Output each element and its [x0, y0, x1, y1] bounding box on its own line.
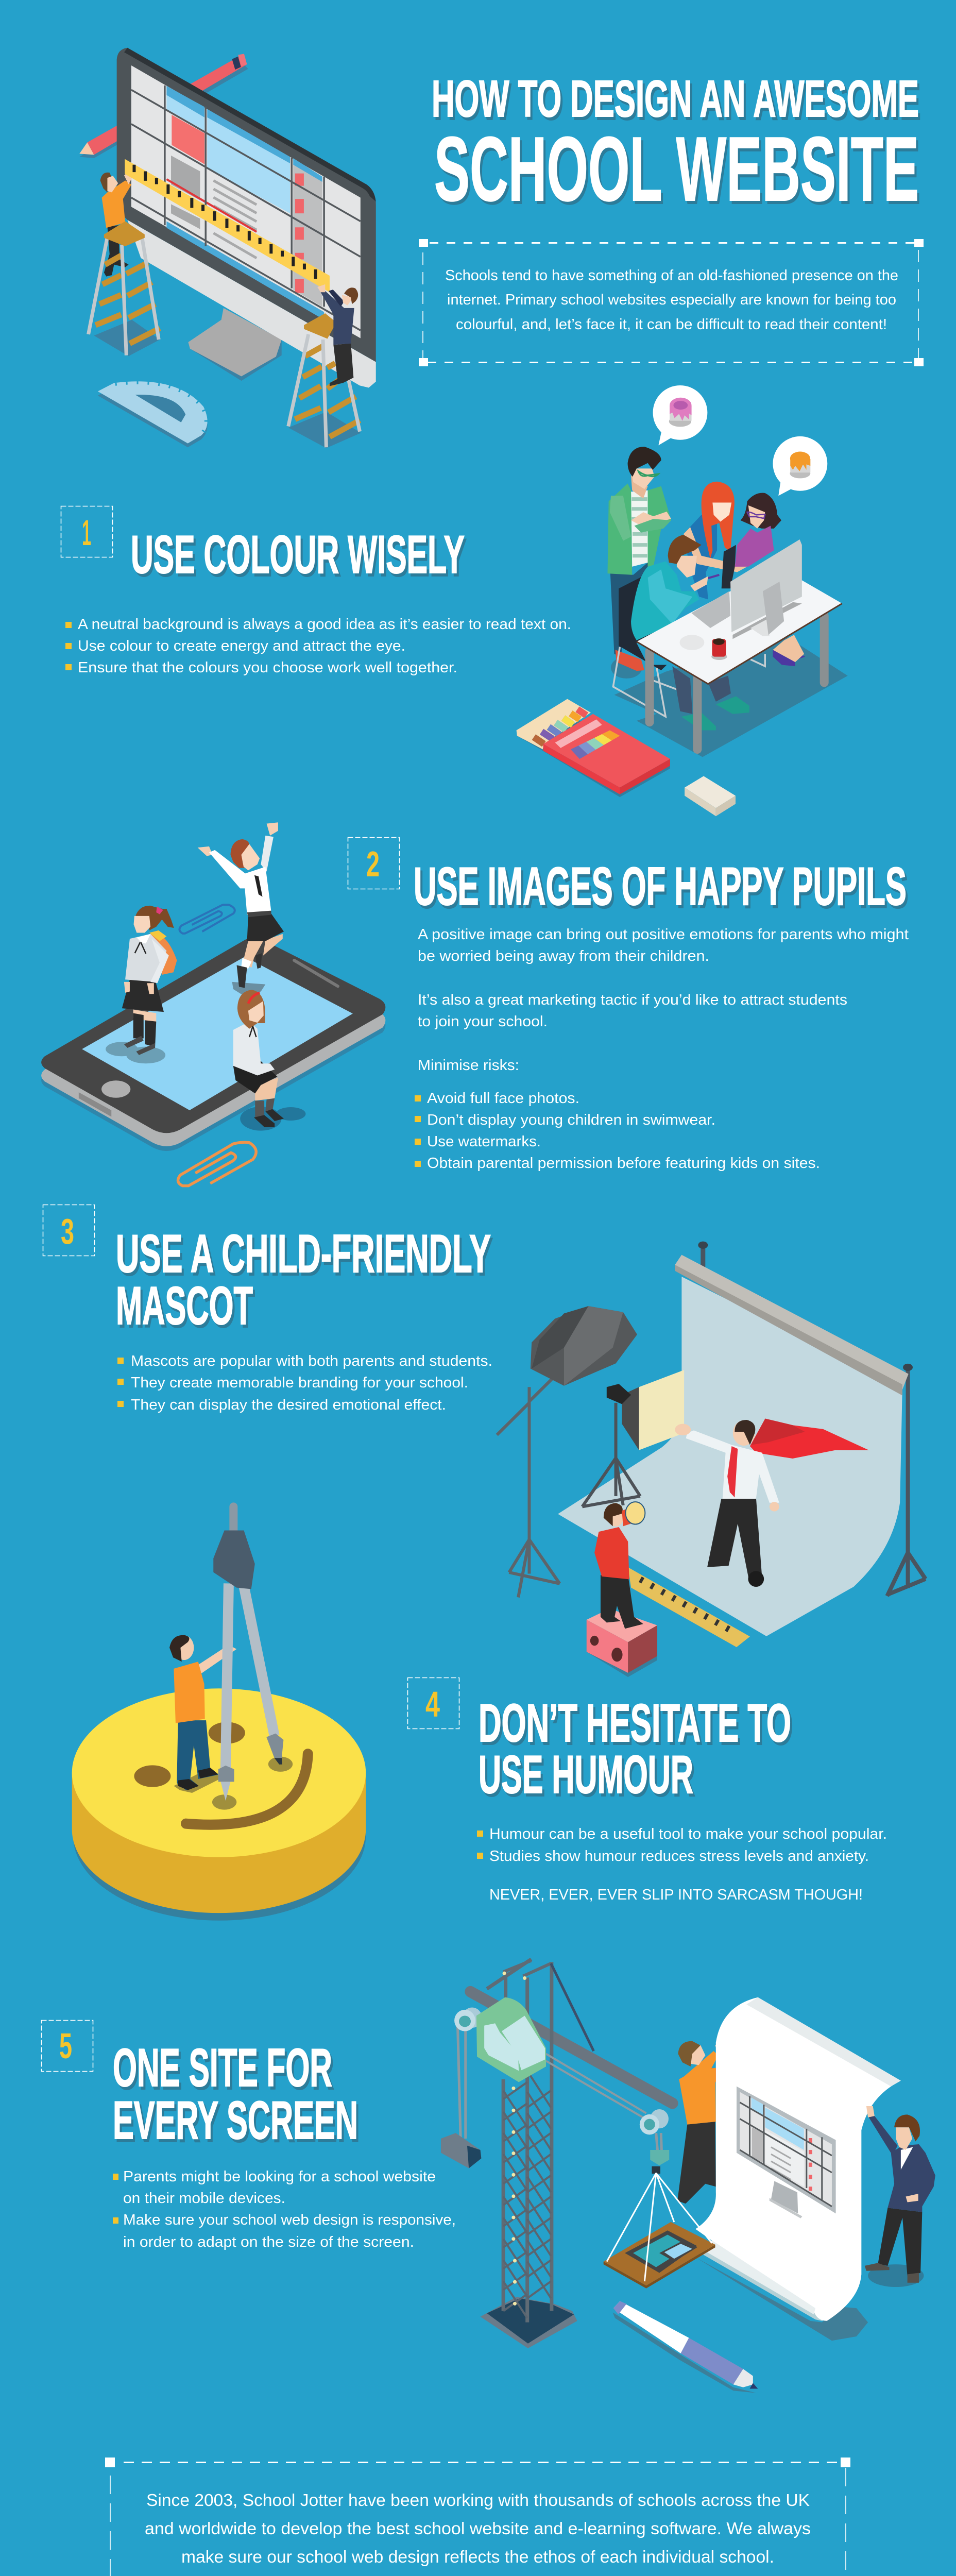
- heading 4: [479, 1693, 791, 1805]
- closing text: and worldwide to develop the best school website and e-learning software. We always: [145, 2519, 811, 2538]
- panel: step 2 use images of happy pupils: [348, 838, 909, 1172]
- number box 1: [61, 506, 112, 557]
- icon: backdrop poles: [698, 1242, 926, 1596]
- panel: step 5 one site for every screen: [41, 2021, 456, 2250]
- icon: red pencil: [79, 54, 248, 158]
- heading 5: ONE SITE FOR: [113, 2038, 332, 2098]
- bullet list 5: Make sure your school web design is responsive,: [123, 2212, 456, 2228]
- paragraph text: Minimise risks:: [418, 1057, 519, 1074]
- icon: yellow ruler: [125, 159, 330, 292]
- icon: pen: [613, 2301, 758, 2393]
- number box 2: 2: [366, 844, 380, 884]
- icon: chair: [613, 575, 765, 717]
- dashed frame: [105, 2458, 850, 2576]
- bullet list 2: Obtain parental permission before featuring kids on sites.: [427, 1155, 820, 1172]
- icon: paper sheet: [695, 1997, 901, 2321]
- bullet list 3: Mascots are popular with both parents and students.: [131, 1353, 492, 1369]
- icon: eraser: [685, 776, 736, 816]
- bullet list 2: [415, 1090, 820, 1172]
- panel: smiley and compass illustration: [72, 1502, 750, 1921]
- bullet list 5: [113, 2168, 456, 2250]
- dashed frame: [419, 239, 924, 366]
- panel: closing dashed box: [105, 2458, 850, 2576]
- number box 5: 5: [59, 2026, 72, 2066]
- icon: yellow measuring tape: [628, 1567, 750, 1647]
- icon: blue paperclip: [179, 905, 235, 934]
- number box 4: [408, 1677, 459, 1729]
- person: man in orange with compass: [169, 1635, 236, 1790]
- number box 4: 4: [425, 1684, 440, 1724]
- person: mascot hero with cape: [675, 1418, 869, 1587]
- person: sitting girl: [233, 990, 305, 1131]
- bullet list 2: Use watermarks.: [427, 1133, 541, 1150]
- number box 3: 3: [61, 1211, 74, 1251]
- bullet list 5: on their mobile devices.: [123, 2190, 285, 2207]
- panel: photo studio illustration: [497, 1242, 926, 1636]
- bullet list 2: Avoid full face photos.: [427, 1090, 579, 1107]
- person: man in navy jacket: [865, 2106, 935, 2287]
- person: worker in orange: [100, 172, 132, 277]
- person: seated man in teal: [631, 535, 805, 731]
- bullet list 1: A neutral background is always a good idea as it’s easier to read text on.: [78, 616, 571, 633]
- icon: speech bubble pink paint: [653, 385, 707, 445]
- closing text: Since 2003, School Jotter have been working with thousands of schools across the UK: [146, 2490, 810, 2510]
- intro text: Schools tend to have something of an old-fashioned presence on the: [445, 267, 898, 284]
- icon: crane: [441, 1959, 673, 2348]
- panel: crane and responsive page illustration: [441, 1959, 935, 2393]
- bullet list 1: Use colour to create energy and attract the eye.: [78, 638, 405, 654]
- bullet list 4: [477, 1826, 887, 1865]
- number box 1: 1: [82, 513, 91, 553]
- icon: monitor chin: [127, 220, 376, 387]
- icon: left ladder: [89, 221, 160, 356]
- paragraph text: It’s also a great marketing tactic if you’d like to attract students: [418, 992, 847, 1008]
- number box 2: [348, 838, 400, 889]
- intro text: [445, 267, 898, 333]
- callout: sarcasm warning: NEVER, EVER, EVER SLIP INTO SARCASM THOUGH!: [489, 1887, 863, 1903]
- intro text: internet. Primary school websites especially are known for being too: [447, 292, 896, 308]
- bullet list 5: in order to adapt on the size of the screen.: [123, 2234, 414, 2250]
- bullet list 1: Ensure that the colours you choose work well together.: [78, 659, 457, 676]
- icon: crayon box: [517, 699, 670, 797]
- heading 3: [116, 1224, 491, 1336]
- closing text: make sure our school web design reflects the ethos of each individual school.: [181, 2547, 774, 2566]
- heading 4: USE HUMOUR: [479, 1745, 693, 1805]
- title: [432, 70, 919, 220]
- heading 3: USE A CHILD-FRIENDLY: [116, 1224, 491, 1284]
- paragraph text: be worried being away from their children.: [418, 948, 709, 964]
- bullet list 1: [65, 616, 571, 676]
- icon: smiley disk: [72, 1688, 366, 1921]
- person: worker in navy: [317, 284, 358, 386]
- person: man with green jacket: [608, 447, 671, 671]
- heading 5: [113, 2038, 358, 2150]
- icon: compass: [213, 1506, 283, 1801]
- panel: header illustration, monitor with ladders: [79, 48, 376, 448]
- person: red haired woman: [684, 482, 747, 599]
- bullet list 3: They create memorable branding for your school.: [131, 1375, 468, 1391]
- panel: intro dashed box: [419, 239, 924, 366]
- person: worker in orange: [677, 2038, 726, 2204]
- person: girl with backpack: [106, 906, 177, 1063]
- icon: desk floor shadow: [611, 635, 848, 757]
- icon: tablet tray and strings: [604, 2173, 715, 2289]
- icon: right ladder: [288, 313, 361, 448]
- heading 5: EVERY SCREEN: [113, 2091, 358, 2150]
- icon: desk: [637, 539, 842, 750]
- paragraph text: [418, 926, 909, 1074]
- icon: softbox: [582, 1370, 684, 1506]
- icon: website on paper: [737, 2087, 836, 2218]
- icon: monitor screen: [131, 65, 361, 338]
- paragraph text: A positive image can bring out positive emotions for parents who might: [418, 926, 909, 943]
- icon: smartphone: [41, 938, 385, 1151]
- person: jumping girl: [198, 822, 284, 996]
- icon: pink block: [587, 1608, 657, 1677]
- icon: monitor frame: [117, 48, 376, 362]
- number box 5: [41, 2021, 93, 2071]
- icon: monitor stand: [188, 308, 282, 377]
- panel: team at desk illustration: [517, 385, 848, 816]
- icon: umbrella light: [497, 1306, 637, 1597]
- icon: speech bubble orange paint: [773, 436, 827, 496]
- bullet list 4: Studies show humour reduces stress levels and anxiety.: [489, 1848, 869, 1865]
- icon: protractor: [98, 381, 208, 447]
- bullet list 5: Parents might be looking for a school website: [123, 2168, 436, 2185]
- panel: step 3 use a child-friendly mascot: [43, 1205, 492, 1413]
- closing text: [145, 2490, 811, 2566]
- paragraph text: to join your school.: [418, 1013, 548, 1030]
- panel: step 1 use colour wisely: [61, 506, 571, 676]
- number box 3: [43, 1205, 95, 1256]
- icon: stand shadow: [190, 341, 282, 381]
- icon: backdrop roller: [675, 1255, 909, 1396]
- intro text: colourful, and, let’s face it, it can be difficult to read their content!: [456, 316, 887, 333]
- icon: backdrop: [558, 1277, 902, 1636]
- person: woman in purple: [722, 493, 781, 588]
- person: boy with megaphone: [594, 1502, 645, 1629]
- heading 3: MASCOT: [116, 1276, 253, 1336]
- bullet list 4: Humour can be a useful tool to make your school popular.: [489, 1826, 887, 1842]
- bullet list 3: [117, 1353, 492, 1413]
- bullet list 3: They can display the desired emotional effect.: [131, 1397, 446, 1413]
- panel: step 4 dont hesitate to use humour: [408, 1677, 887, 1903]
- heading 1: USE COLOUR WISELY: [131, 525, 465, 585]
- icon: orange paperclip: [178, 1142, 256, 1186]
- panel: phone and pupils illustration: [41, 822, 385, 1186]
- icon: paper shadow: [695, 2257, 868, 2341]
- bullet list 2: Don’t display young children in swimwear.: [427, 1112, 715, 1128]
